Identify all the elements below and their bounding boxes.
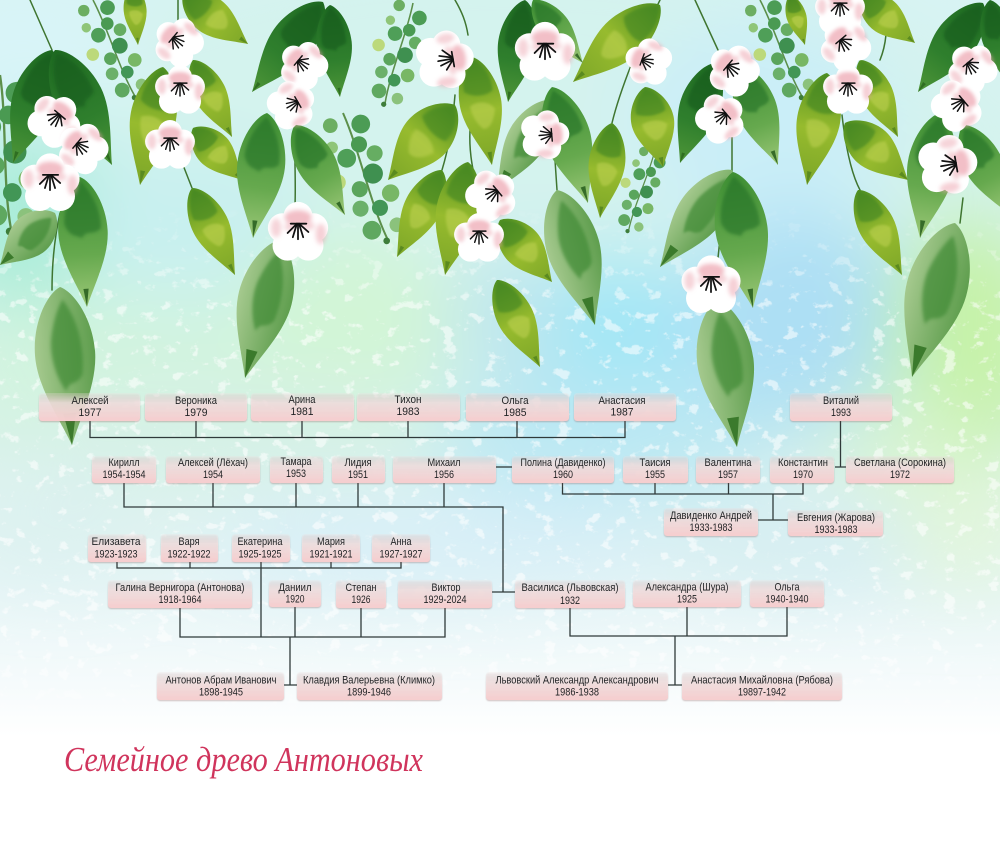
generation row: 1951-1972 — [92, 456, 954, 536]
person: Виталий 1993: Виталий — [823, 395, 859, 407]
person: Виталий 1993: 1993 — [831, 407, 851, 419]
person: Варя — [161, 534, 218, 562]
person: Виталий 1993 — [790, 393, 892, 421]
person: Даниил: Даниил — [278, 582, 312, 594]
person: Анастасия 1987: Анастасия — [598, 395, 646, 407]
person: Клавдия Валерьевна (Климко): 1899-1946 — [347, 686, 391, 698]
person: Василиса (Львовская) — [515, 580, 625, 608]
person: Екатерина — [232, 534, 290, 562]
person: Тихон 1983 — [357, 393, 460, 421]
person: Алексей 1977: 1977 — [78, 407, 102, 419]
person: Клавдия Валерьевна (Климко) — [297, 672, 442, 700]
person: Анастасия Михайловна (Рябова): Анастасия Михайловна (Рябова) — [691, 674, 833, 686]
hanging vines with round leaves — [0, 0, 822, 255]
person: Тамара — [270, 456, 323, 483]
person: Михаил — [393, 456, 496, 483]
person: Кирилл: Кирилл — [108, 457, 140, 469]
person: Алексей 1977 — [39, 393, 140, 421]
person: Алексей 1977: Алексей — [72, 395, 108, 407]
person: Василиса (Львовская): 1932 — [560, 595, 580, 607]
person: Ольга 1940: Ольга — [774, 582, 800, 594]
person: Ольга 1985 — [466, 393, 569, 421]
person: Кирилл — [92, 456, 156, 483]
person: Лидия — [332, 456, 385, 483]
person: Антонов Абрам Иванович — [157, 672, 284, 700]
person: Алексей (Лёхач) — [166, 456, 260, 483]
person: Елизавета — [88, 534, 146, 562]
thin stems — [30, 0, 963, 290]
person: Константин: Константин — [778, 457, 828, 469]
person: Тихон 1983: Тихон — [394, 394, 422, 406]
person: Евгения (Жарова): 1933-1983 — [814, 524, 858, 536]
person: Таисия — [623, 456, 688, 483]
person: Михаил: Михаил — [428, 457, 460, 469]
person: Анна: 1927-1927 — [380, 548, 422, 560]
person: Светлана (Сорокина): 1972 — [890, 469, 910, 481]
person: Львовский Александр Александрович — [486, 672, 668, 700]
person: Валентина: Валентина — [704, 457, 752, 469]
person: Степан: Степан — [346, 582, 376, 594]
person: Таисия: 1955 — [645, 469, 665, 481]
person: Даниил — [269, 580, 321, 607]
person: Анастасия Михайловна (Рябова) — [682, 672, 842, 700]
leaves: centre branch — [313, 0, 684, 375]
generation row: children 1977-1987 — [39, 393, 892, 421]
person: Светлана (Сорокина) — [846, 456, 954, 483]
person: Клавдия Валерьевна (Климко): Клавдия Валерьевна (Климко) — [303, 674, 435, 686]
person: Лидия: Лидия — [344, 457, 372, 469]
person: Лидия: 1951 — [348, 469, 368, 481]
person: Давиденко Андрей: Давиденко Андрей — [670, 510, 752, 522]
person: Александра (Шура) — [633, 580, 741, 607]
person: Степан: 1926 — [352, 594, 370, 606]
person: Валентина — [696, 456, 760, 483]
person: Львовский Александр Александрович: Львовский Александр Александрович — [496, 674, 658, 686]
person: Вероника 1979: Вероника — [175, 395, 218, 407]
person: Вероника 1979: 1979 — [184, 407, 208, 419]
person: Варя: Варя — [178, 536, 200, 548]
person: Анастасия 1987: 1987 — [610, 406, 634, 418]
person: Мария: Мария — [317, 536, 345, 548]
person: Виктор: Виктор — [432, 582, 460, 594]
person: Анастасия 1987 — [574, 393, 676, 421]
person: Алексей (Лёхач): Алексей (Лёхач) — [178, 457, 248, 469]
person: Елизавета: 1923-1923 — [94, 548, 138, 560]
person: Ольга 1985: 1985 — [504, 407, 526, 419]
person: Виктор: 1929-2024 — [424, 594, 466, 606]
person: Виктор — [398, 580, 492, 608]
person: Александра (Шура): Александра (Шура) — [646, 582, 728, 594]
person: Екатерина: Екатерина — [238, 536, 283, 548]
person: Галина Вернигора (Антонова) — [108, 580, 252, 608]
pink blossoms — [19, 0, 1000, 313]
person: Антонов Абрам Иванович: 1898-1945 — [199, 686, 243, 698]
person: Константин: 1970 — [793, 469, 813, 481]
person: Вероника 1979 — [145, 393, 247, 421]
person: Полина (Давиденко) — [512, 456, 614, 483]
person: Мария: 1921-1921 — [310, 548, 352, 560]
person: Галина Вернигора (Антонова): Галина Вернигора (Антонова) — [116, 582, 244, 594]
person: Анастасия Михайловна (Рябова): 19897-1942 — [738, 686, 786, 698]
person: Евгения (Жарова): Евгения (Жарова) — [797, 512, 875, 524]
person: Варя: 1922-1922 — [168, 548, 210, 560]
person: Анна: Анна — [390, 536, 412, 548]
person: Антонов Абрам Иванович: Антонов Абрам Иванович — [166, 674, 276, 686]
leaves: right branch — [642, 0, 1000, 451]
person: Михаил: 1956 — [434, 469, 454, 481]
leaves: left branch — [0, 0, 362, 447]
person: Мария — [302, 534, 360, 562]
person: Степан — [336, 580, 386, 608]
person: Львовский Александр Александрович: 1986-1938 — [555, 686, 599, 698]
person: Тихон 1983: 1983 — [396, 406, 420, 418]
person: Екатерина: 1925-1925 — [238, 548, 282, 560]
person: Кирилл: 1954-1954 — [102, 469, 146, 481]
person: Александра (Шура): 1925 — [677, 594, 697, 606]
person: Давиденко Андрей — [664, 508, 758, 536]
person: Галина Вернигора (Антонова): 1918-1964 — [158, 594, 202, 606]
person: Василиса (Львовская): Василиса (Львовская) — [522, 582, 618, 594]
person: Давиденко Андрей: 1933-1983 — [690, 522, 732, 534]
person: Елизавета: Елизавета — [92, 536, 141, 548]
person: Ольга 1985: Ольга — [502, 395, 529, 407]
person: Валентина: 1957 — [718, 469, 738, 481]
person: Светлана (Сорокина): Светлана (Сорокина) — [854, 457, 946, 469]
person: Арина 1981: 1981 — [290, 406, 314, 418]
generation row: founders — [157, 672, 842, 700]
person: Таисия: Таисия — [640, 457, 671, 469]
person: Даниил: 1920 — [286, 594, 304, 606]
person: Константин — [770, 456, 834, 483]
person: Тамара: Тамара — [280, 456, 312, 468]
person: Полина (Давиденко): 1960 — [553, 469, 573, 481]
person: Полина (Давиденко): Полина (Давиденко) — [520, 457, 606, 469]
person: Арина 1981 — [251, 393, 354, 421]
person: Евгения (Жарова) — [788, 510, 883, 536]
generation row: deceased infants 1921-1927 — [88, 534, 430, 562]
connector lines — [90, 421, 846, 685]
person: Арина 1981: Арина — [288, 394, 316, 406]
person: Тамара: 1953 — [286, 468, 306, 480]
person: Алексей (Лёхач): 1954 — [203, 469, 223, 481]
person: Ольга 1940 — [750, 580, 824, 607]
generation row: 1918-1940 — [108, 580, 824, 608]
title: Семейное древо Антоновых — [64, 740, 423, 779]
person: Анна — [372, 534, 430, 562]
person: Ольга 1940: 1940-1940 — [766, 594, 808, 606]
